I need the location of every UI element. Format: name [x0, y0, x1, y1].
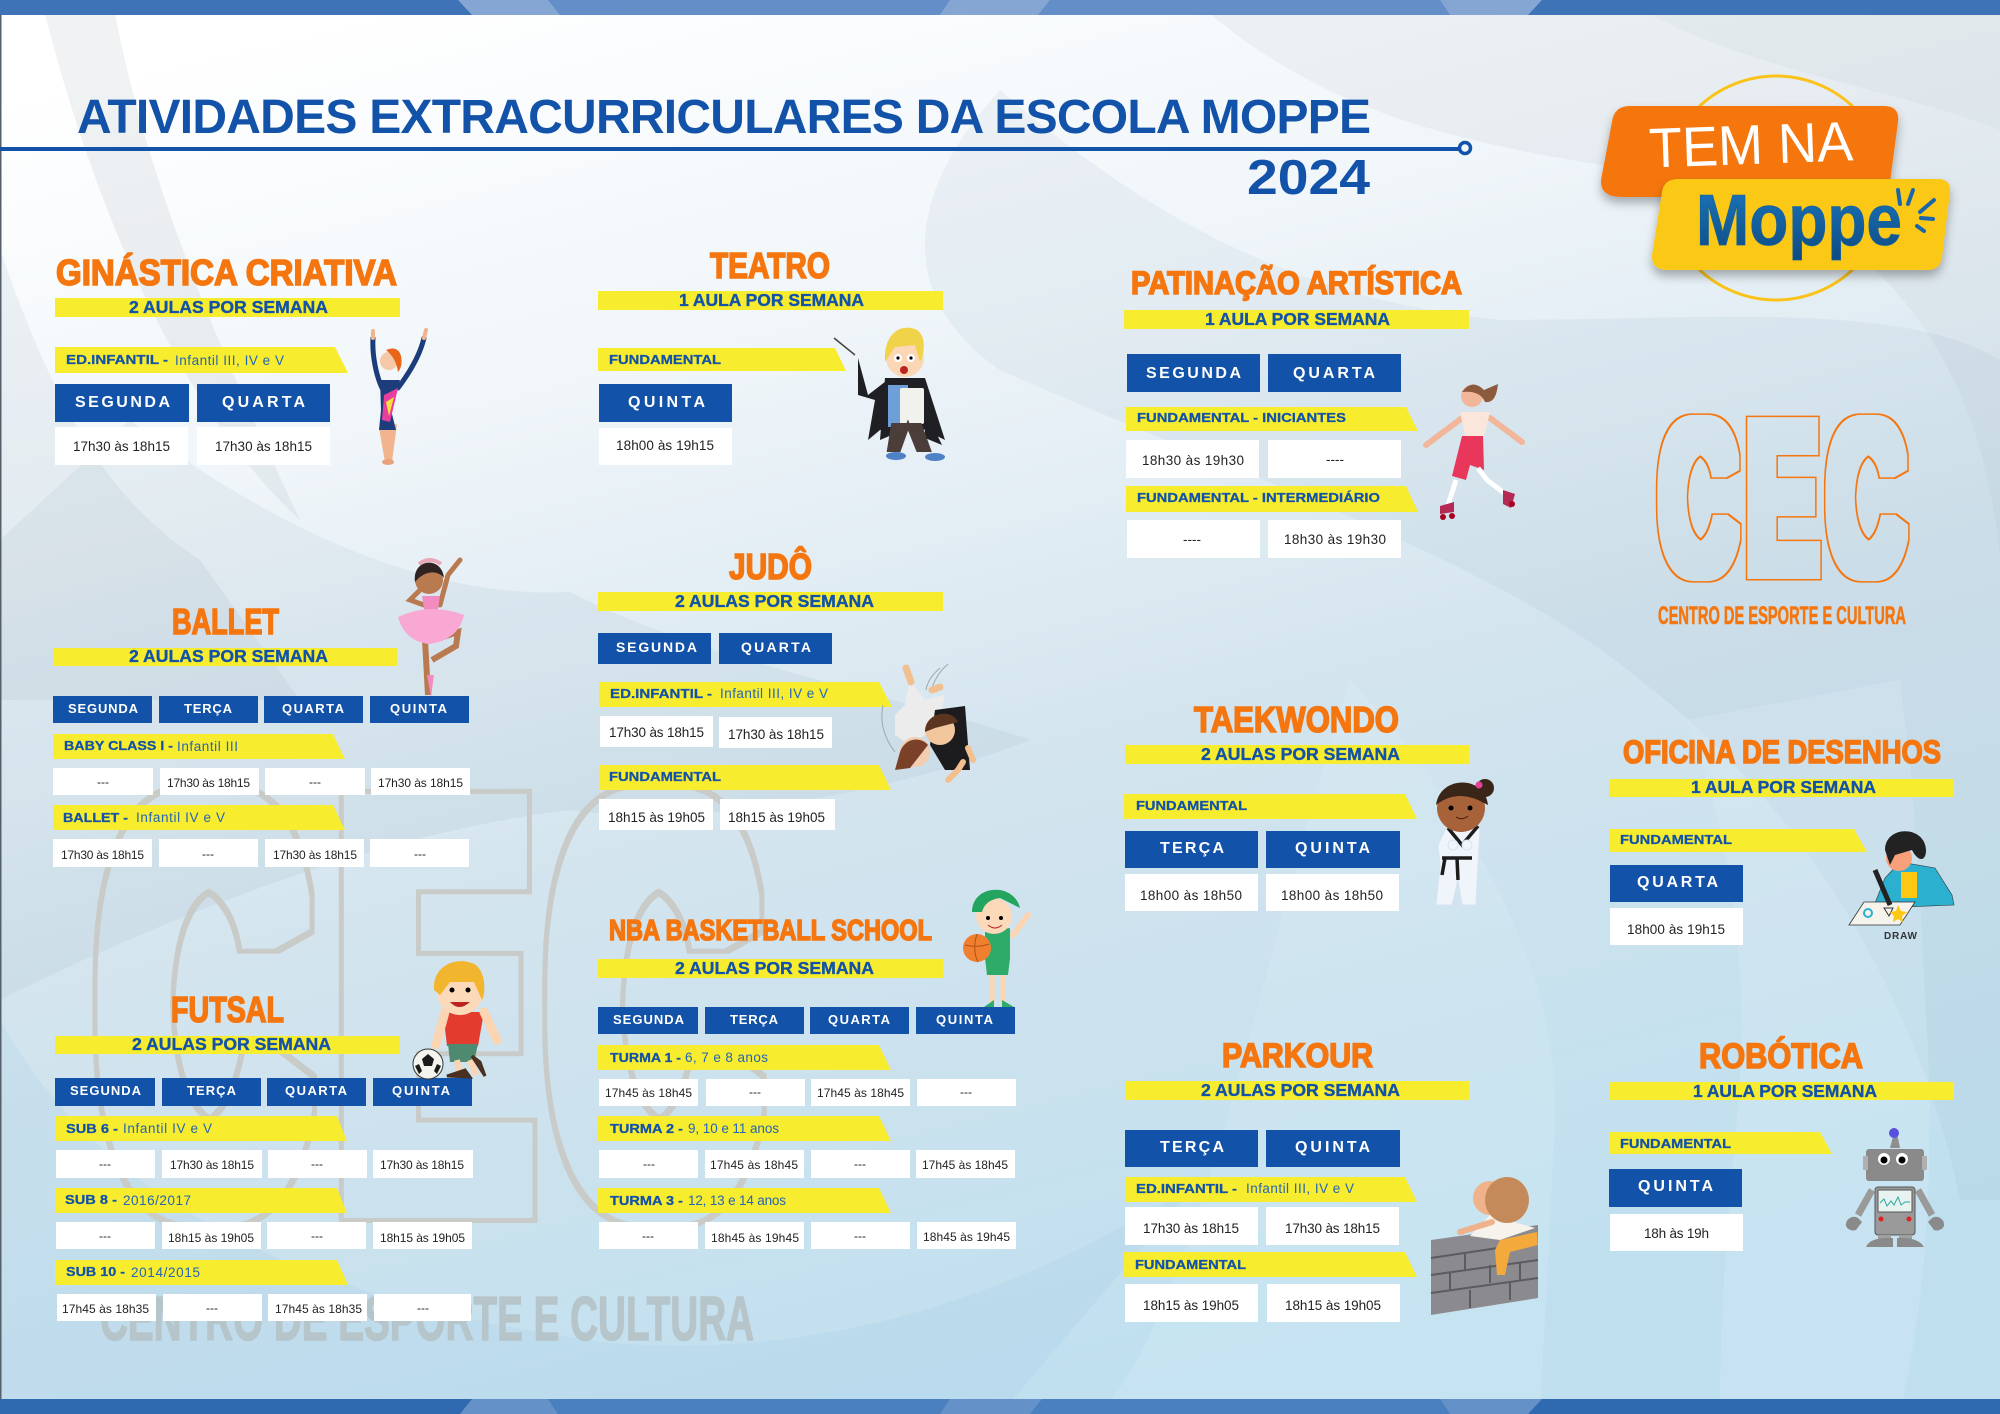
weekly classes bar: 2 AULAS POR SEMANA — [129, 297, 328, 317]
days: QUINTA — [1638, 1178, 1713, 1195]
weekly classes bar — [598, 591, 943, 611]
times: fundamental: 18h15 às 19h05 — [1143, 1298, 1239, 1313]
times: sub 6: --- — [99, 1157, 111, 1171]
times: turma 2: --- — [643, 1157, 655, 1171]
icon: soccer boy — [413, 961, 497, 1079]
times: 18h00 às 18h50 — [1281, 888, 1383, 903]
days: SEGUNDA — [616, 639, 697, 655]
logo: tem na moppe — [1601, 76, 1950, 300]
level label: sub 8: 2016/2017 — [123, 1193, 191, 1208]
level label: sub 10: SUB 10 - — [66, 1264, 125, 1279]
times — [1125, 874, 1399, 911]
times: turma 1: --- — [749, 1085, 761, 1099]
days — [1125, 1130, 1400, 1167]
level label: sub 6: SUB 6 - — [66, 1121, 118, 1136]
level label: sub 6: Infantil IV e V — [123, 1121, 212, 1136]
level label: fundamental — [1124, 1252, 1417, 1277]
icon: judo throw — [882, 664, 973, 780]
level label: ed.infantil: Infantil III, IV e V — [1246, 1181, 1354, 1196]
times: iniciantes: 18h30 às 19h30 — [1142, 453, 1244, 468]
times: turma 1 — [599, 1079, 1016, 1106]
days: QUINTA — [392, 1083, 451, 1098]
times: sub 10: 17h45 às 18h35 — [275, 1302, 362, 1316]
level label: turma 3 — [598, 1188, 891, 1213]
left edge line — [0, 0, 2, 1414]
days: QUARTA — [1293, 365, 1375, 382]
level label: sub 8: SUB 8 - — [65, 1192, 117, 1207]
times: turma 3: 18h45 às 19h45 — [711, 1231, 799, 1245]
main title: ATIVIDADES EXTRACURRICULARES DA ESCOLA MOPPE — [77, 91, 1371, 144]
times: fundamental — [1125, 1284, 1400, 1322]
level label: fundamental: FUNDAMENTAL — [1135, 1257, 1246, 1272]
days — [55, 384, 330, 422]
times: ed.infantil: 17h30 às 18h15 — [1285, 1221, 1380, 1236]
times: intermediário: 18h30 às 19h30 — [1284, 532, 1386, 547]
days: TERÇA — [1160, 1139, 1224, 1156]
panel: robótica — [1609, 1036, 1954, 1251]
times: 18h00 às 18h50 — [1140, 888, 1242, 903]
times: sub 6 — [56, 1150, 473, 1178]
times: ballet — [53, 839, 469, 867]
times — [55, 427, 330, 465]
logo: tem na moppe: TEM NA — [1648, 109, 1855, 180]
level label: turma 1: TURMA 1 - — [610, 1050, 681, 1065]
level label: turma 1 — [598, 1045, 891, 1070]
logo: CEC outline: CEC — [1660, 378, 1904, 618]
level label: baby class: BABY CLASS I - — [64, 738, 173, 753]
level label: FUNDAMENTAL — [1620, 1136, 1731, 1151]
weekly classes bar: 2 AULAS POR SEMANA — [132, 1034, 331, 1054]
level label: iniciantes — [1126, 407, 1418, 431]
times: sub 10 — [57, 1294, 471, 1321]
year: 2024 — [1247, 151, 1370, 205]
level label: ballet: BALLET - — [63, 810, 128, 825]
weekly classes bar — [53, 646, 397, 666]
weekly classes bar: 1 AULA POR SEMANA — [1693, 1081, 1877, 1101]
times: turma 3: --- — [854, 1229, 866, 1243]
days: SEGUNDA — [75, 394, 170, 411]
times: ed.infantil: 17h30 às 18h15 — [609, 725, 704, 740]
times: iniciantes — [1126, 440, 1401, 478]
level label: intermediário: FUNDAMENTAL - INTERMEDIÁRIO — [1137, 490, 1380, 505]
icon: basketball boy — [963, 890, 1028, 1007]
days: QUARTA — [741, 639, 811, 655]
watermark: CEC outline letters: CEC — [102, 688, 754, 1324]
icon: ballerina — [398, 560, 464, 697]
weekly classes bar — [1609, 777, 1954, 797]
heading: FUTSAL — [171, 989, 284, 1030]
days: SEGUNDA — [70, 1083, 142, 1098]
level label: iniciantes: FUNDAMENTAL - INICIANTES — [1137, 410, 1346, 425]
weekly classes bar — [55, 297, 400, 317]
times: fundamental: 18h15 às 19h05 — [728, 810, 825, 825]
heading: OFICINA DE DESENHOS — [1623, 734, 1941, 770]
times: turma 3: 18h45 às 19h45 — [923, 1230, 1010, 1244]
panel: parkour — [1124, 1037, 1538, 1322]
times: 18h às 19h — [1644, 1226, 1709, 1241]
weekly classes bar — [1125, 1080, 1469, 1100]
level label: sub 6 — [55, 1116, 347, 1141]
icon: taekwondo girl — [1436, 779, 1494, 905]
level label: ED.INFANTIL - — [66, 352, 168, 367]
times — [1610, 908, 1743, 945]
times: turma 3: --- — [642, 1229, 654, 1243]
times: turma 2: --- — [854, 1157, 866, 1171]
days — [1610, 865, 1743, 902]
level label — [1609, 829, 1867, 852]
level label: fundamental — [599, 765, 891, 790]
level label: ballet — [53, 805, 345, 830]
times: ballet: 17h30 às 18h15 — [61, 848, 144, 862]
panel: futsal — [55, 961, 497, 1321]
weekly classes bar: 2 AULAS POR SEMANA — [1201, 744, 1400, 764]
days: QUINTA — [390, 701, 448, 716]
times: intermediário — [1127, 520, 1401, 558]
level label — [598, 348, 846, 371]
level label: sub 10 — [55, 1260, 348, 1285]
weekly classes bar: 1 AULA POR SEMANA — [679, 290, 864, 310]
days — [55, 1078, 472, 1106]
times: sub 6: 17h30 às 18h15 — [380, 1158, 464, 1172]
bottom band — [0, 1399, 2000, 1414]
weekly classes bar: 2 AULAS POR SEMANA — [675, 591, 874, 611]
times: turma 2: 17h45 às 18h45 — [710, 1158, 798, 1172]
times: ed.infantil: 17h30 às 18h15 — [1143, 1221, 1239, 1236]
days: QUARTA — [1637, 874, 1718, 891]
logo: tem na moppe: Moppe — [1696, 181, 1902, 261]
level label: turma 2: TURMA 2 - — [610, 1121, 683, 1136]
panel: oficina de desenhos — [1609, 734, 1954, 945]
days: QUARTA — [282, 701, 345, 716]
level label: FUNDAMENTAL — [1620, 832, 1732, 847]
level label: intermediário — [1126, 486, 1418, 512]
times — [599, 428, 732, 465]
times: ed.infantil: 17h30 às 18h15 — [728, 727, 824, 742]
times: ballet: --- — [202, 847, 214, 861]
times: baby class: --- — [97, 775, 109, 789]
times: iniciantes: ---- — [1326, 452, 1344, 467]
weekly classes bar — [1124, 309, 1469, 329]
days — [53, 696, 469, 723]
times: fundamental: 18h15 às 19h05 — [1285, 1298, 1381, 1313]
heading: TEATRO — [710, 245, 830, 286]
days: QUINTA — [936, 1012, 994, 1027]
panel: patinação artística — [1124, 265, 1522, 558]
panel: teatro — [598, 245, 945, 465]
heading: ROBÓTICA — [1699, 1036, 1863, 1076]
times: baby class: 17h30 às 18h15 — [378, 776, 463, 790]
times: baby class: 17h30 às 18h15 — [167, 776, 250, 790]
days: QUINTA — [1295, 840, 1370, 857]
level label: sub 10: 2014/2015 — [131, 1265, 200, 1280]
days: QUARTA — [828, 1012, 891, 1027]
level label: Infantil III, IV e V — [175, 353, 284, 368]
times: turma 1: --- — [960, 1085, 972, 1099]
times: turma 1: 17h45 às 18h45 — [605, 1086, 692, 1100]
heading: GINÁSTICA CRIATIVA — [56, 252, 397, 293]
days: SEGUNDA — [68, 701, 139, 716]
weekly classes bar — [598, 958, 943, 978]
days — [598, 1007, 1015, 1034]
times: turma 3 — [599, 1222, 1016, 1249]
level label: turma 3: TURMA 3 - — [610, 1193, 683, 1208]
icon: roller skater — [1426, 384, 1522, 520]
icon: robot — [1846, 1128, 1944, 1247]
times: turma 2 — [599, 1150, 1015, 1178]
level label: turma 2 — [598, 1116, 891, 1141]
level label: baby class — [53, 734, 345, 759]
days: TERÇA — [730, 1012, 779, 1027]
times: baby class: --- — [309, 775, 321, 789]
watermark: centro de esporte e cultura: CENTRO DE ESPORTE E CULTURA — [100, 1285, 754, 1354]
days: QUINTA — [1295, 1139, 1370, 1156]
times: sub 8: 18h15 às 19h05 — [168, 1231, 254, 1245]
times: sub 10: 17h45 às 18h35 — [62, 1302, 149, 1316]
times: turma 2: 17h45 às 18h45 — [922, 1158, 1008, 1172]
weekly classes bar — [1609, 1081, 1954, 1101]
days — [1609, 1169, 1742, 1207]
weekly classes bar: 2 AULAS POR SEMANA — [675, 958, 874, 978]
icon: gymnast — [373, 330, 426, 465]
panel: judô — [598, 545, 973, 830]
level label: ed.infantil: Infantil III, IV e V — [720, 686, 828, 701]
days — [599, 384, 732, 422]
times: sub 6: 17h30 às 18h15 — [170, 1158, 254, 1172]
days: TERÇA — [1160, 840, 1224, 857]
level label: ballet: Infantil IV e V — [136, 810, 225, 825]
panel: nba basketball school — [598, 890, 1028, 1249]
days: QUARTA — [222, 394, 305, 411]
weekly classes bar — [1125, 744, 1469, 764]
times: sub 10: --- — [417, 1301, 429, 1315]
level label: fundamental: FUNDAMENTAL — [609, 769, 721, 784]
weekly classes bar — [598, 290, 943, 310]
weekly classes bar: 2 AULAS POR SEMANA — [1201, 1080, 1400, 1100]
times: 17h30 às 18h15 — [73, 439, 170, 454]
times: 17h30 às 18h15 — [215, 439, 312, 454]
level label: FUNDAMENTAL — [609, 352, 721, 367]
times: sub 8: --- — [311, 1229, 323, 1243]
times: baby class — [53, 768, 470, 795]
level label: ed.infantil: ED.INFANTIL - — [1136, 1181, 1237, 1196]
days: TERÇA — [184, 701, 233, 716]
level label: FUNDAMENTAL — [1136, 798, 1247, 813]
times: fundamental: 18h15 às 19h05 — [608, 810, 705, 825]
times: sub 10: --- — [206, 1301, 218, 1315]
level label — [1609, 1132, 1832, 1154]
heading: BALLET — [172, 601, 279, 642]
icon: teacher — [834, 328, 945, 461]
heading: JUDÔ — [729, 545, 812, 587]
times: intermediário: ---- — [1183, 532, 1201, 547]
times: ed.infantil — [1125, 1207, 1399, 1245]
days: TERÇA — [187, 1083, 237, 1098]
times: sub 8: 18h15 às 19h05 — [380, 1231, 465, 1245]
title rule with end dot — [0, 142, 1470, 154]
heading: PARKOUR — [1222, 1037, 1373, 1075]
level label: sub 8 — [55, 1188, 347, 1213]
times: sub 6: --- — [311, 1157, 323, 1171]
times: ballet: 17h30 às 18h15 — [273, 848, 357, 862]
times: sub 8 — [56, 1222, 472, 1249]
icon: boy drawing: DRAW — [1884, 931, 1918, 942]
icon: child climbing a brick wall — [1431, 1177, 1538, 1315]
times: 18h00 às 19h15 — [616, 438, 714, 453]
times: sub 8: --- — [99, 1229, 111, 1243]
days: SEGUNDA — [613, 1012, 685, 1027]
level label — [55, 347, 348, 373]
level label: baby class: Infantil III — [177, 739, 238, 754]
level label: ed.infantil — [1125, 1177, 1417, 1202]
days — [1127, 354, 1401, 392]
level label: turma 1: 6, 7 e 8 anos — [685, 1050, 768, 1065]
times: ed.infantil — [600, 716, 832, 748]
days: SEGUNDA — [1146, 365, 1241, 382]
heading: TAEKWONDO — [1194, 699, 1399, 740]
level label: ed.infantil: ED.INFANTIL - — [610, 686, 712, 701]
weekly classes bar: 2 AULAS POR SEMANA — [129, 646, 328, 666]
top band — [0, 0, 2000, 15]
level label: turma 2: 9, 10 e 11 anos — [688, 1121, 779, 1136]
heading: PATINAÇÃO ARTÍSTICA — [1131, 265, 1462, 301]
icon: boy drawing — [1849, 831, 1954, 942]
times: fundamental — [599, 799, 835, 830]
level label: ed.infantil — [599, 682, 892, 707]
weekly classes bar: 1 AULA POR SEMANA — [1205, 309, 1390, 329]
panel: taekwondo — [1124, 699, 1494, 911]
times: ballet: --- — [414, 847, 426, 861]
panel: ballet — [53, 560, 470, 867]
level label — [1124, 794, 1417, 819]
panel: ginástica criativa — [55, 252, 426, 465]
heading: NBA BASKETBALL SCHOOL — [609, 915, 932, 947]
times — [1610, 1214, 1743, 1251]
days — [598, 633, 832, 664]
times: 18h00 às 19h15 — [1627, 922, 1725, 937]
days: QUINTA — [628, 394, 705, 411]
weekly classes bar — [55, 1034, 400, 1054]
weekly classes bar: 1 AULA POR SEMANA — [1691, 777, 1876, 797]
days: QUARTA — [285, 1083, 348, 1098]
days — [1125, 831, 1400, 868]
times: turma 1: 17h45 às 18h45 — [817, 1086, 904, 1100]
level label: turma 3: 12, 13 e 14 anos — [688, 1193, 786, 1208]
